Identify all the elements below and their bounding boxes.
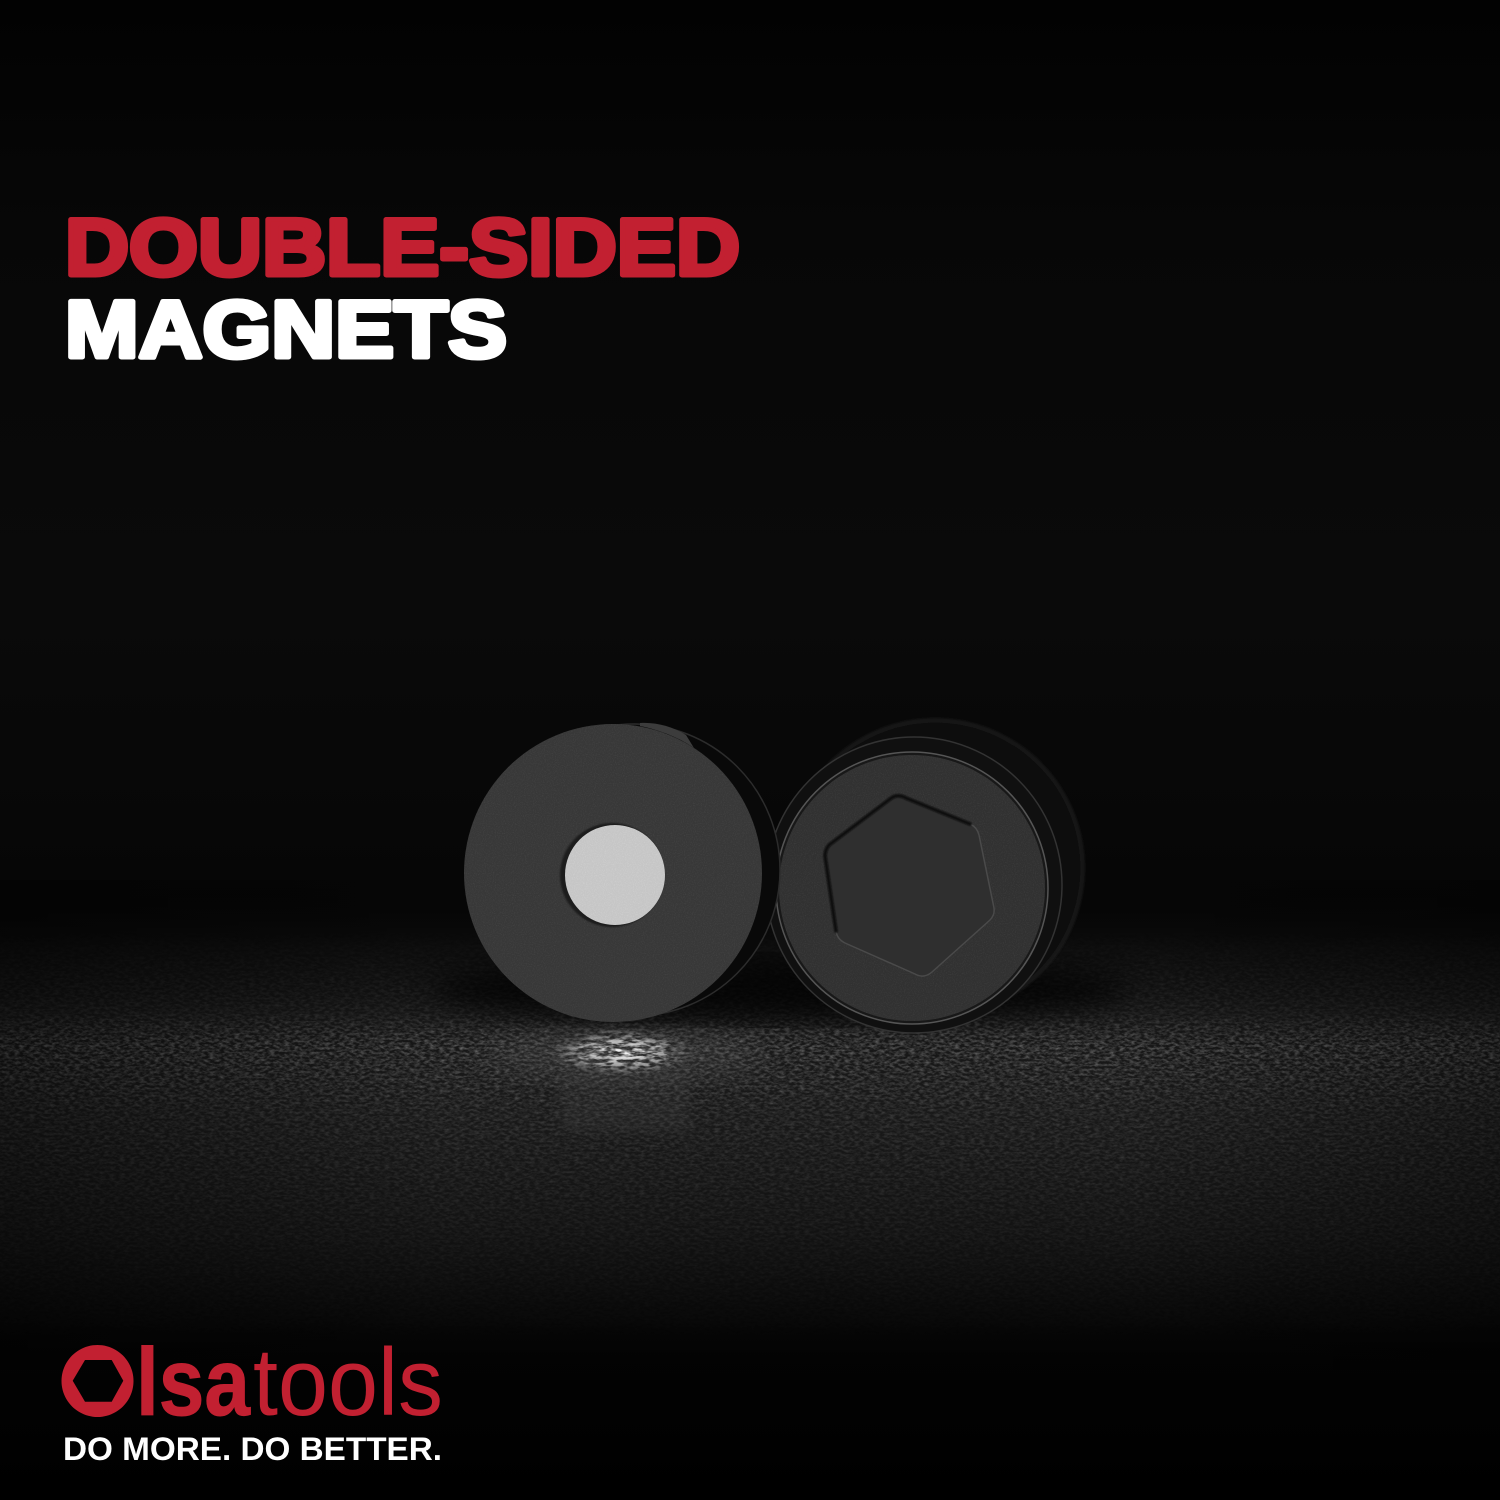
magnet: right, hexagon side <box>766 720 1083 1033</box>
magnet: left, silver disc side <box>464 723 780 1022</box>
hexagon recess <box>825 796 994 976</box>
logo wordmark light: tools <box>253 1329 443 1436</box>
logo: Olsatools <box>62 1329 443 1436</box>
heading <box>65 203 740 375</box>
logo hexagon O <box>62 1345 134 1417</box>
heading line: double-sided: DOUBLE-SIDED <box>65 203 740 293</box>
heading line: magnets: MAGNETS <box>65 285 507 375</box>
tagline: DO MORE. DO BETTER. <box>63 1431 442 1467</box>
textured floor surface <box>0 944 1500 1315</box>
logo wordmark bold: lsa <box>136 1329 251 1436</box>
silver disc <box>560 823 665 927</box>
floor reflection highlight <box>500 1028 750 1124</box>
